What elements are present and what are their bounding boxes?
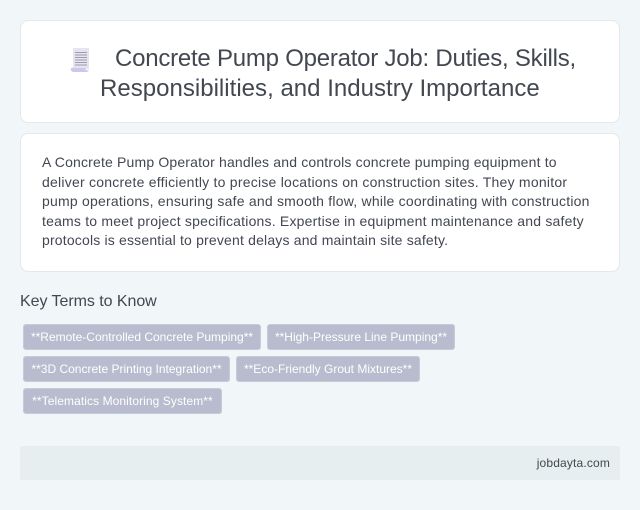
description text: A Concrete Pump Operator handles and controls concrete pumping equipment to [42, 154, 557, 170]
tag: **Remote-Controlled Concrete Pumping** [31, 330, 253, 344]
description text [42, 154, 590, 248]
title [100, 45, 576, 102]
description text: protocols is essential to prevent delays and maintain site safety. [42, 232, 448, 248]
description text: teams to meet project specifications. Expertise in equipment maintenance and safety [42, 213, 584, 229]
tag: **Eco-Friendly Grout Mixtures** [244, 362, 412, 376]
tag [236, 356, 420, 382]
tag [23, 356, 230, 382]
title: Responsibilities, and Industry Importance [100, 75, 540, 102]
tag [23, 388, 222, 414]
tag list [23, 324, 455, 414]
footer bar [20, 446, 620, 480]
icon: document scroll [70, 48, 89, 72]
tag [23, 324, 261, 350]
tag [267, 324, 455, 350]
heading: key terms: Key Terms to Know [20, 293, 157, 310]
tag: **3D Concrete Printing Integration** [31, 362, 222, 376]
description text: deliver concrete efficiently to precise locations on construction sites. They monitor [42, 174, 567, 190]
panel: description [20, 133, 620, 272]
title: Concrete Pump Operator Job: Duties, Skills, [115, 45, 576, 72]
description text: pump operations, ensuring safe and smooth flow, while coordinating with construction [42, 193, 590, 209]
tag: **High-Pressure Line Pumping** [275, 330, 447, 344]
tag: **Telematics Monitoring System** [32, 394, 213, 408]
panel: title card [20, 20, 620, 123]
footer source text: jobdayta.com [537, 456, 610, 470]
